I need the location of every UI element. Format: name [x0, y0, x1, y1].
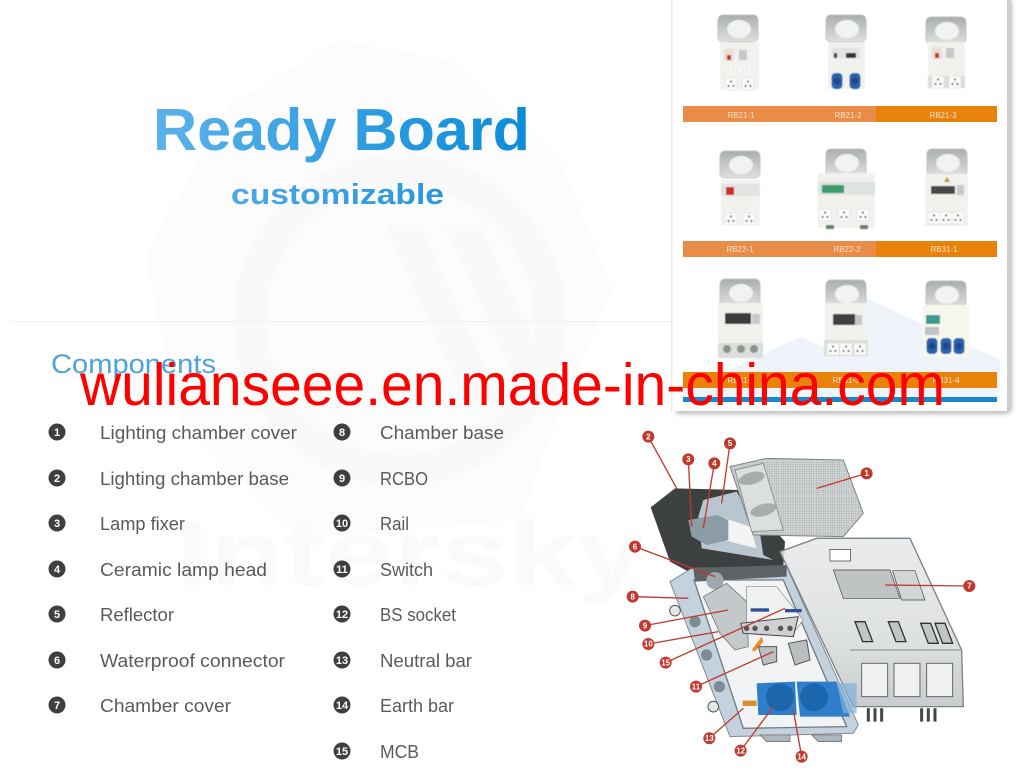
callout numbers: 7 — [967, 582, 972, 591]
label bar row 1: RB21-1 — [727, 111, 755, 120]
callout numbers: 5 — [728, 439, 733, 448]
callout leader lines — [633, 437, 969, 757]
lighting chamber cover — [730, 458, 863, 537]
components list, column 2: Chamber base — [380, 423, 504, 443]
components list, column 1: Reflector — [100, 605, 174, 625]
components list, column 2 — [334, 423, 504, 762]
components list, column 2: 15 — [336, 746, 348, 758]
components list, column 2: 9 — [339, 473, 345, 485]
components list, column 2: RCBO — [380, 469, 428, 489]
components list, column 1: Chamber cover — [100, 696, 231, 716]
components list, column 1: 6 — [54, 655, 60, 667]
components list, column 1 — [48, 423, 297, 716]
product RB22-1 — [720, 151, 760, 225]
product RB31-3 — [824, 280, 868, 356]
label bar row 1: RB21-2 — [834, 111, 862, 120]
label bar row 2: RB31-1 — [930, 245, 958, 254]
panel shadow — [676, 0, 1012, 414]
blue BS sockets — [757, 682, 850, 717]
product RB22-2 — [818, 149, 875, 229]
callout numbers: 2 — [646, 432, 651, 441]
product thumbnails row 3 — [718, 279, 969, 358]
chamber base — [670, 565, 858, 742]
callout numbers: 9 — [643, 621, 648, 630]
components list, column 2: 10 — [336, 518, 348, 530]
components list, column 1: Lighting chamber cover — [100, 423, 297, 443]
components list, column 2: MCB — [380, 742, 419, 762]
reflector — [698, 492, 773, 560]
product RB31-4 — [923, 281, 969, 357]
product thumbnails row 2 — [720, 149, 968, 229]
components list, column 1: Lighting chamber base — [100, 469, 289, 489]
components list, column 2: Neutral bar — [380, 651, 472, 671]
components list, column 1: Lamp fixer — [100, 514, 185, 534]
faint mountain graphic — [683, 296, 1000, 392]
product RB31-1 — [925, 149, 968, 226]
callout numbers: 1 — [864, 469, 869, 478]
components list, column 2: Switch — [380, 560, 433, 580]
product RB21-1 — [718, 15, 759, 90]
components list, column 1: 3 — [54, 518, 60, 530]
callout numbers: 13 — [705, 734, 714, 743]
callout numbers: 3 — [686, 455, 691, 464]
components list, column 1: 1 — [54, 427, 60, 439]
MCB and rail — [741, 587, 803, 652]
product thumbnails row 1 — [718, 15, 966, 90]
label bar row 2: RB22-2 — [833, 245, 861, 254]
callout badges — [627, 431, 975, 763]
exploded diagram — [627, 431, 975, 763]
diagram artwork — [651, 458, 963, 742]
neutral bar — [743, 701, 757, 706]
callout numbers: 14 — [797, 752, 807, 761]
callout numbers: 4 — [712, 459, 717, 468]
components list, column 1: 4 — [54, 564, 61, 576]
components list, column 2: 13 — [336, 655, 348, 667]
product RB31-2 — [718, 279, 763, 358]
components list, column 2: 8 — [339, 427, 345, 439]
label bar row 1 — [683, 106, 997, 122]
label bar row 2: RB22-1 — [726, 245, 754, 254]
components list, column 2: Rail — [380, 514, 409, 534]
heading: components: Components — [51, 349, 216, 379]
callout numbers: 15 — [661, 658, 671, 667]
components list, column 1: 5 — [54, 609, 60, 621]
background watermark logo — [145, 40, 612, 540]
components list, column 1: Ceramic lamp head — [100, 560, 267, 580]
label bar row 3 — [683, 372, 997, 402]
title: Ready Board — [153, 97, 530, 163]
components list, column 2: Earth bar — [380, 696, 454, 716]
components list, column 2: 14 — [336, 700, 349, 712]
components list, column 1: Waterproof connector — [100, 651, 285, 671]
callout numbers — [630, 432, 972, 761]
panel: product range — [671, 0, 1012, 414]
label bar row 3: RB31-4 — [932, 376, 960, 385]
components list, column 2: BS socket — [380, 605, 456, 625]
lamp fixer and head — [688, 515, 728, 545]
switches — [758, 640, 810, 665]
background watermark: Intersky: Intersky — [175, 503, 645, 605]
callout numbers: 8 — [630, 592, 635, 601]
components list, column 2: 12 — [336, 609, 348, 621]
subtitle: customizable — [231, 179, 444, 211]
label bar row 3: RB31-3 — [832, 376, 860, 385]
components list, column 2: 11 — [336, 564, 348, 576]
components list, column 1: 7 — [54, 700, 60, 712]
callout numbers: 6 — [633, 542, 638, 551]
product RB21-3 — [926, 17, 966, 88]
chamber cover — [780, 538, 963, 722]
lighting chamber base — [651, 488, 785, 571]
RCBO — [703, 583, 748, 650]
red site watermark: wulianseee.en.made-in-china.com — [79, 352, 945, 418]
components list, column 1: 2 — [54, 473, 60, 485]
callout numbers: 11 — [692, 682, 701, 691]
callout numbers: 12 — [736, 746, 746, 755]
product RB21-2 — [826, 15, 866, 89]
callout numbers: 10 — [644, 640, 653, 649]
label bar row 1: RB21-3 — [929, 111, 957, 120]
label bar row 2 — [683, 241, 997, 257]
label bar row 3: RB31-2 — [727, 376, 755, 385]
